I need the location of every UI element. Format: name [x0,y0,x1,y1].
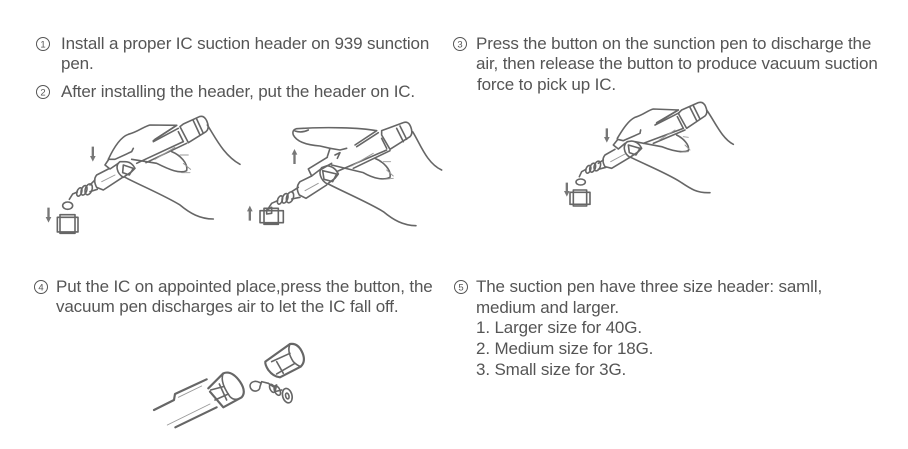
step 2 text: After installing the header, put the header on IC. [61,82,415,101]
step 5 text: 1. Larger size for 40G. [476,318,642,337]
step 3 text: air, then release the button to produce vacuum suction [476,54,878,73]
step 4 text: Put the IC on appointed place,press the button, the [56,277,433,296]
number badge 1: 1 [40,40,46,50]
step 1 text: pen. [61,54,94,73]
number badge 1 [36,38,50,50]
step 3 text: Press the button on the sunction pen to discharge the [476,34,871,52]
number badge 2 [36,86,50,98]
step 3 text [476,34,878,94]
number badge 4: 4 [38,282,44,294]
step 5 text: The suction pen have three size header: samll, [476,277,822,296]
number badge 3: 3 [457,40,463,50]
step 4 text: vacuum pen discharges air to let the IC fall off. [56,297,398,316]
number badge 2: 2 [40,88,46,98]
step 1 text [61,34,429,73]
number badge 3 [454,38,466,50]
illustration: pen picking up IC with vacuum [564,102,733,206]
step 3 text: force to pick up IC. [477,75,616,94]
step 5 text [476,277,822,379]
number badge 4 [34,280,48,294]
step 1 text: Install a proper IC suction header on 939 sunction [61,34,429,53]
illustration: finger released, pen lifting IC [247,122,442,226]
step 5 text: medium and larger. [476,298,619,317]
step 4 text [56,277,433,316]
step 5 text: 3. Small size for 3G. [476,360,626,379]
number badge 5: 5 [458,282,464,294]
step 5 text: 2. Medium size for 18G. [476,339,653,358]
number badge 5 [454,280,468,294]
illustration: hand pressing pen on IC [46,116,240,233]
illustration: pen tip, header and cap detached [154,344,304,427]
